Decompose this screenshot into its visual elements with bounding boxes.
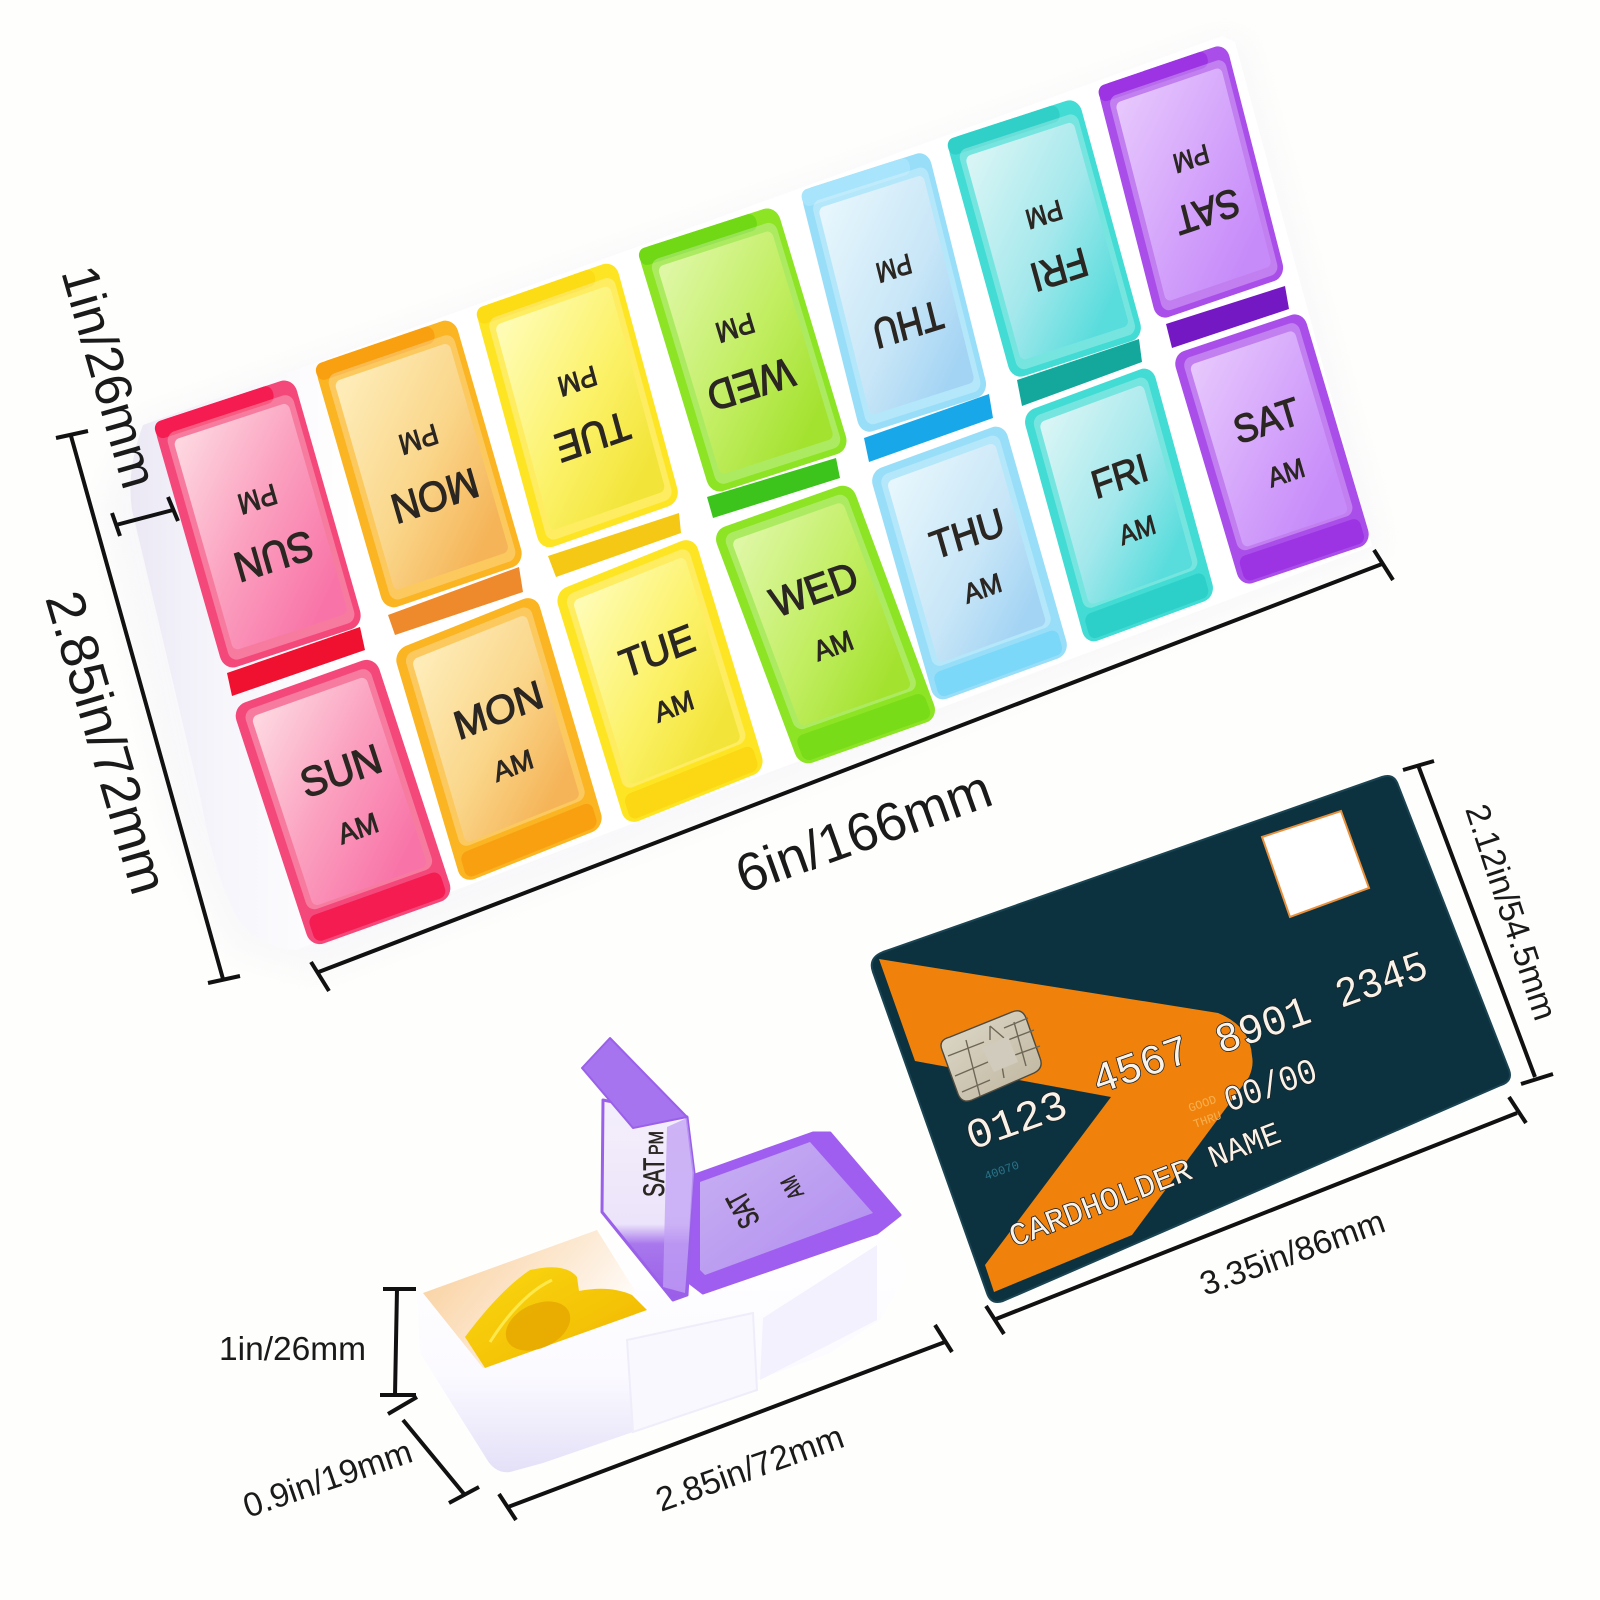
dimension: 6in/166mm: 6in/166mm bbox=[728, 759, 1000, 905]
cardholder name: NAME bbox=[1203, 1116, 1287, 1177]
card body bbox=[872, 776, 1510, 1302]
cardholder name bbox=[1004, 1116, 1287, 1256]
valid thru bbox=[1187, 1093, 1223, 1132]
dimension: card height 2.12in/54.5mm bbox=[1403, 761, 1564, 1084]
pills bbox=[465, 1267, 647, 1368]
box body bbox=[417, 1230, 907, 1472]
card number: 4567 bbox=[1086, 1028, 1197, 1106]
lid: THU PM bbox=[800, 150, 989, 435]
card number bbox=[960, 943, 1435, 1162]
small card code: 40070 bbox=[983, 1159, 1021, 1184]
lid: SUN PM: SUN bbox=[229, 521, 319, 591]
lid: TUE AM: TUE bbox=[614, 616, 700, 687]
open lid: SAT bbox=[639, 1158, 671, 1197]
lid: THU PM: THU bbox=[868, 290, 947, 356]
lid: THU AM: THU bbox=[925, 500, 1009, 569]
dimension: box 2.85in/72mm bbox=[499, 1325, 952, 1520]
right panel shading bbox=[760, 1245, 877, 1380]
lid: SUN AM bbox=[232, 656, 454, 948]
lid: SAT PM: PM bbox=[1170, 137, 1212, 178]
lid: WED AM: AM bbox=[809, 624, 858, 667]
lid: TUE PM bbox=[475, 260, 681, 551]
card number: 2345 bbox=[1329, 943, 1435, 1020]
dimension: 2.85in/72mm height: 2.85in/72mm bbox=[33, 584, 179, 901]
lid: SUN PM bbox=[153, 377, 364, 671]
dimension: card width 3.35in/86mm bbox=[986, 1097, 1526, 1334]
dimension: card height 2.12in/54.5mm: 2.12in/54.5mm bbox=[1457, 800, 1564, 1025]
lid: THU PM: PM bbox=[873, 247, 915, 289]
lid: SAT PM: SAT bbox=[1171, 180, 1244, 244]
lid: WED AM bbox=[712, 482, 939, 767]
lid: FRI PM: PM bbox=[1022, 193, 1066, 235]
expiry date: 00/00 bbox=[1219, 1052, 1323, 1122]
lid: MON PM: PM bbox=[395, 417, 442, 461]
dimension: box 2.85in/72mm: 2.85in/72mm bbox=[651, 1418, 849, 1520]
open lid: PM bbox=[645, 1131, 667, 1155]
lid: FRI PM bbox=[946, 97, 1144, 380]
card number: 0123 bbox=[960, 1082, 1074, 1162]
lid: TUE AM: AM bbox=[651, 684, 698, 729]
front panel bbox=[627, 1313, 757, 1432]
lid: SUN PM: PM bbox=[234, 477, 281, 521]
dimension: box 1in/26mm bbox=[219, 1289, 416, 1395]
open lid bbox=[582, 1038, 694, 1300]
lid: FRI AM: AM bbox=[1116, 508, 1159, 551]
lid: SUN AM: AM bbox=[334, 806, 382, 850]
valid thru: THRU bbox=[1192, 1109, 1223, 1132]
lid: WED PM: WED bbox=[702, 348, 799, 419]
dimension: 1in/26mm lid: 1in/26mm bbox=[49, 259, 168, 495]
lid: SAT AM: SAT bbox=[1228, 389, 1305, 452]
dimension: box 0.9in/19mm: 0.9in/19mm bbox=[238, 1433, 417, 1526]
lid: FRI PM: FRI bbox=[1025, 238, 1093, 300]
valid thru: GOOD bbox=[1187, 1093, 1218, 1116]
lid: MON AM: MON bbox=[449, 672, 548, 749]
signature square bbox=[1262, 811, 1369, 917]
lid: FRI AM: FRI bbox=[1087, 445, 1153, 507]
lid: MON AM bbox=[393, 594, 605, 884]
dimension: 2.85in/72mm height bbox=[33, 431, 240, 983]
pill organizer: seven day tray bbox=[100, 34, 1385, 975]
dimension: 6in/166mm bbox=[311, 550, 1393, 991]
hinge strips bbox=[227, 286, 1289, 696]
dimension: box 0.9in/19mm bbox=[238, 1397, 479, 1526]
lid: MON PM bbox=[314, 317, 525, 611]
closed lid: AM bbox=[776, 1171, 809, 1203]
closed lid: SAT bbox=[720, 1186, 767, 1233]
tray base bbox=[100, 34, 1385, 975]
cardholder name: CARDHOLDER bbox=[1004, 1153, 1198, 1256]
dimension: card width 3.35in/86mm: 3.35in/86mm bbox=[1195, 1203, 1390, 1304]
lid: WED AM: WED bbox=[764, 554, 864, 626]
lid: THU AM: AM bbox=[960, 567, 1005, 610]
compartment well bbox=[423, 1230, 647, 1368]
lid: SAT AM: AM bbox=[1264, 452, 1308, 494]
lid: FRI AM bbox=[1022, 365, 1216, 645]
lid: TUE AM bbox=[554, 536, 766, 826]
EMV chip bbox=[941, 1011, 1041, 1101]
lid: WED PM: PM bbox=[712, 306, 759, 349]
lid: THU AM bbox=[869, 423, 1070, 703]
lid: SAT PM bbox=[1097, 43, 1286, 321]
orange chevron bbox=[879, 959, 1253, 1292]
lid: WED PM bbox=[637, 205, 850, 495]
dimension: box 1in/26mm: 1in/26mm bbox=[219, 1331, 366, 1368]
lid: MON PM: MON bbox=[386, 459, 483, 532]
lid: MON AM: AM bbox=[490, 743, 537, 788]
credit card bbox=[872, 776, 1510, 1302]
card number: 8901 bbox=[1209, 988, 1318, 1066]
single open pill box bbox=[417, 1038, 907, 1472]
lid: SAT AM bbox=[1172, 311, 1372, 587]
closed lid bbox=[690, 1133, 900, 1293]
lid: SUN AM: SUN bbox=[294, 734, 387, 807]
lid: TUE PM: PM bbox=[554, 359, 601, 403]
lid: TUE PM: TUE bbox=[550, 402, 635, 471]
